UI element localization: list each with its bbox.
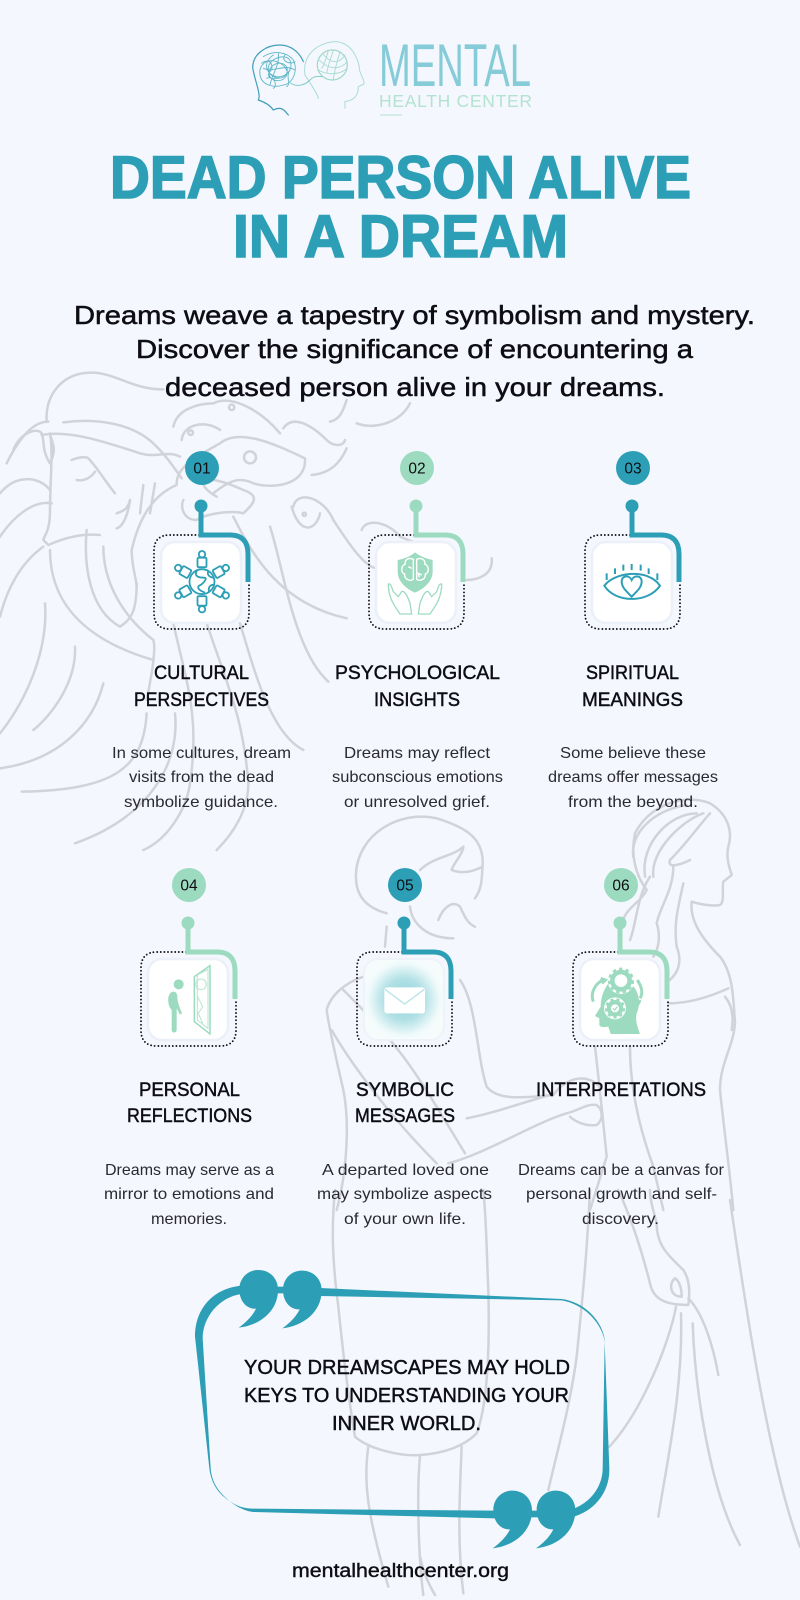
number badge 01: 01 bbox=[193, 460, 211, 478]
number badge 03: 03 bbox=[624, 460, 642, 478]
background line art: dreaming woman bbox=[0, 373, 492, 850]
description 01: In some cultures, dream bbox=[112, 745, 291, 762]
background line art: two figures, lower part bbox=[333, 1190, 800, 1595]
intro text: Discover the significance of encountering a bbox=[136, 334, 694, 364]
number badge 04 bbox=[172, 868, 206, 902]
description 06 bbox=[518, 1162, 725, 1228]
icon: person before a mirror bbox=[168, 966, 210, 1034]
footer website: mentalhealthcenter.org bbox=[292, 1561, 509, 1582]
icon: brain shield and hands bbox=[388, 552, 442, 614]
heading 04 bbox=[127, 1079, 252, 1127]
heading 05: SYMBOLIC bbox=[356, 1079, 454, 1101]
description 03: dreams offer messages bbox=[548, 769, 718, 786]
quote text: INNER WORLD. bbox=[332, 1413, 481, 1435]
intro text: Dreams weave a tapestry of symbolism and mystery. bbox=[74, 300, 755, 330]
description 03: from the beyond. bbox=[568, 794, 698, 811]
icon frame 02 bbox=[369, 500, 464, 629]
description 06: Dreams can be a canvas for bbox=[518, 1162, 725, 1179]
description 04: Dreams may serve as a bbox=[105, 1162, 274, 1179]
icon: head with gears bbox=[592, 967, 642, 1034]
heading 05 bbox=[355, 1079, 455, 1127]
description 05: of your own life. bbox=[344, 1211, 466, 1228]
heading 06: INTERPRETATIONS bbox=[536, 1079, 706, 1101]
description 04: memories. bbox=[151, 1211, 227, 1228]
panel: 04 personal reflections bbox=[104, 868, 274, 1228]
quote text: KEYS TO UNDERSTANDING YOUR bbox=[244, 1385, 569, 1407]
quote frame bbox=[195, 1286, 609, 1518]
heading 04: PERSONAL bbox=[139, 1079, 240, 1101]
heading 01 bbox=[134, 662, 269, 711]
panel: 03 spiritual meanings bbox=[548, 451, 718, 811]
heading 01: CULTURAL bbox=[154, 662, 249, 684]
description 01: visits from the dead bbox=[129, 769, 274, 786]
heading 02 bbox=[335, 662, 500, 711]
icon frame 04 bbox=[141, 916, 236, 1046]
heading 03: MEANINGS bbox=[582, 689, 683, 711]
logo subline: HEALTH CENTER bbox=[379, 91, 532, 111]
description 02: subconscious emotions bbox=[332, 769, 503, 786]
description 02: Dreams may reflect bbox=[344, 745, 491, 762]
heading 05: MESSAGES bbox=[355, 1105, 455, 1127]
description 01: symbolize guidance. bbox=[124, 794, 278, 811]
description 02 bbox=[332, 745, 503, 811]
heading 04: REFLECTIONS bbox=[127, 1105, 252, 1127]
number badge 02 bbox=[400, 451, 434, 485]
description 05 bbox=[317, 1162, 492, 1228]
icon frame 01 bbox=[154, 500, 249, 629]
description 01 bbox=[112, 745, 291, 811]
closing quote marks bbox=[493, 1491, 575, 1548]
number badge 05 bbox=[388, 868, 422, 902]
background line art: two figures, upper part bbox=[327, 800, 735, 1210]
number badge 04: 04 bbox=[180, 878, 198, 894]
number badge 03 bbox=[616, 451, 650, 485]
number badge 05: 05 bbox=[396, 878, 414, 894]
description 03: Some believe these bbox=[560, 745, 706, 762]
description 05: A departed loved one bbox=[322, 1162, 489, 1179]
panel: 01 cultural perspectives bbox=[112, 451, 291, 811]
icon: people around a globe bbox=[173, 551, 231, 612]
logo underline bbox=[380, 114, 402, 116]
intro text bbox=[74, 300, 755, 402]
description 04: mirror to emotions and bbox=[104, 1186, 274, 1203]
intro text: deceased person alive in your dreams. bbox=[165, 372, 665, 402]
description 02: or unresolved grief. bbox=[344, 794, 490, 811]
number badge 06 bbox=[604, 868, 638, 902]
icon frame 05 bbox=[357, 916, 452, 1046]
panel: 06 interpretations bbox=[518, 868, 725, 1228]
number badge 02: 02 bbox=[408, 460, 426, 478]
description 03 bbox=[548, 745, 718, 811]
panel: 05 symbolic messages bbox=[317, 868, 492, 1228]
panel: quote callout bbox=[195, 1270, 609, 1548]
title: DEAD PERSON ALIVE bbox=[110, 144, 691, 211]
heading 03 bbox=[582, 662, 683, 711]
quote text bbox=[244, 1357, 570, 1435]
title bbox=[110, 144, 691, 270]
description 06: discovery. bbox=[582, 1211, 659, 1228]
heading 03: SPIRITUAL bbox=[586, 662, 679, 684]
heading 02: INSIGHTS bbox=[374, 689, 460, 711]
description 06: personal growth and self- bbox=[526, 1186, 717, 1203]
heading 01: PERSPECTIVES bbox=[134, 689, 269, 711]
description 04 bbox=[104, 1162, 274, 1228]
logo wordmark: MENTAL bbox=[379, 32, 531, 99]
logo: Mental Health Center bbox=[253, 32, 532, 116]
opening quote marks bbox=[239, 1270, 322, 1328]
number badge 01 bbox=[185, 451, 219, 485]
icon: two heads with tangled thread and yarn ball bbox=[253, 42, 364, 115]
icon frame 06 bbox=[573, 916, 668, 1046]
description 05: may symbolize aspects bbox=[317, 1186, 492, 1203]
icon: eye with heart bbox=[604, 564, 660, 599]
panel: 02 psychological insights bbox=[332, 451, 503, 811]
heading 02: PSYCHOLOGICAL bbox=[335, 662, 500, 684]
quote text: YOUR DREAMSCAPES MAY HOLD bbox=[244, 1357, 570, 1379]
number badge 06: 06 bbox=[612, 878, 630, 894]
icon: envelope bbox=[384, 987, 425, 1013]
icon frame 03 bbox=[585, 500, 680, 629]
title: IN A DREAM bbox=[233, 203, 568, 270]
